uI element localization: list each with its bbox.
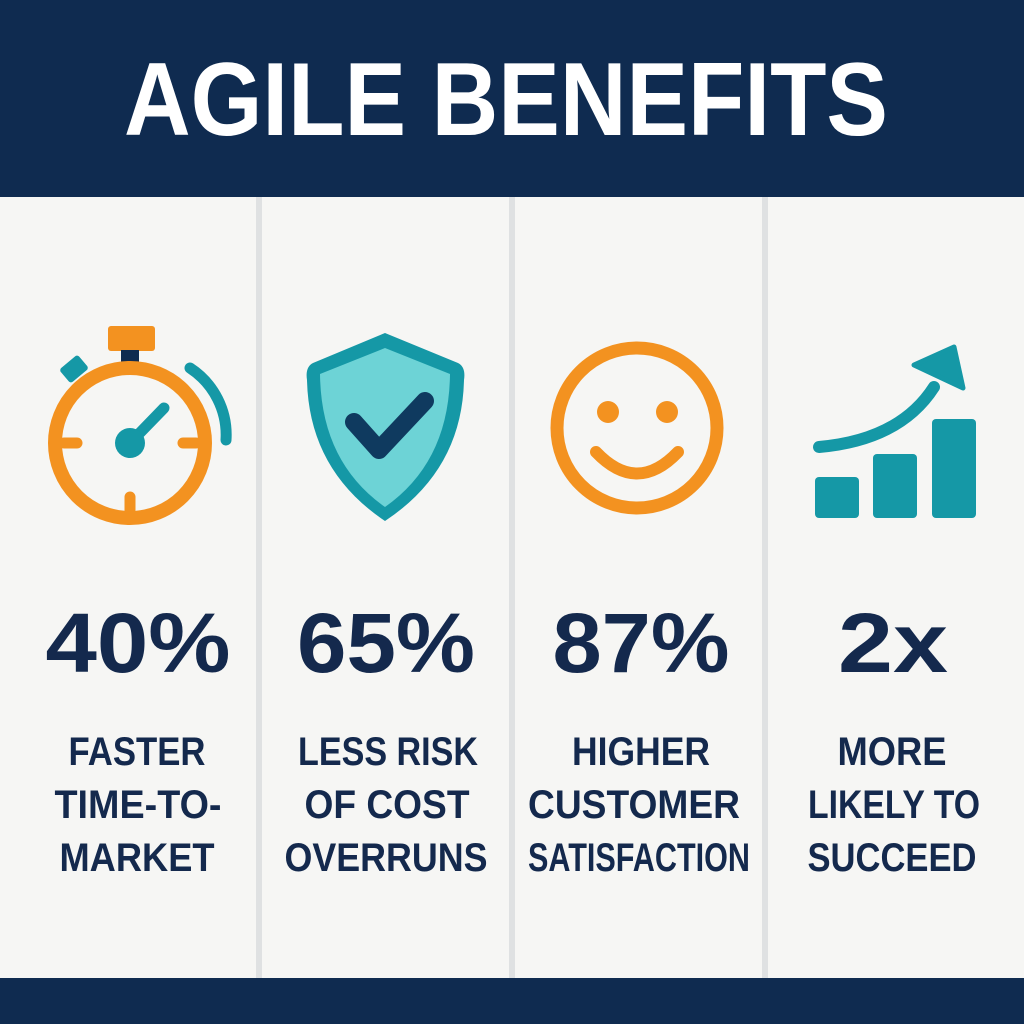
panel: faster time-to-market: [46, 326, 230, 880]
label: faster time-to-market: FASTER: [68, 730, 206, 774]
label: faster time-to-market: TIME-TO-: [54, 783, 222, 827]
label: faster time-to-market: [54, 730, 222, 880]
stat: 40%: 40%: [46, 596, 230, 690]
icon: growth chart: [815, 347, 976, 518]
header banner: [0, 0, 1024, 197]
label: more likely to succeed: LIKELY TO: [808, 783, 980, 827]
footer bar: [0, 978, 1024, 1024]
label: higher customer satisfaction: [528, 730, 750, 880]
stat: 65%: 65%: [297, 596, 475, 690]
label: less risk of cost overruns: LESS RISK: [298, 730, 478, 774]
title: AGILE BENEFITS: [124, 42, 888, 158]
label: faster time-to-market: MARKET: [60, 836, 214, 880]
label: higher customer satisfaction: CUSTOMER: [528, 783, 740, 827]
stat: 87%: 87%: [552, 596, 730, 690]
label: less risk of cost overruns: OVERRUNS: [284, 836, 488, 880]
label: higher customer satisfaction: HIGHER: [572, 730, 710, 774]
label: less risk of cost overruns: OF COST: [304, 783, 470, 827]
icon: smiley face: [557, 348, 717, 508]
icon: shield with check: [307, 333, 464, 521]
panel: higher customer satisfaction: [528, 348, 750, 880]
icon: stopwatch: [55, 326, 226, 518]
label: more likely to succeed: MORE: [838, 730, 946, 774]
label: more likely to succeed: [808, 730, 980, 880]
label: more likely to succeed: SUCCEED: [808, 836, 976, 880]
panel: less risk of cost overruns: [284, 333, 488, 880]
label: higher customer satisfaction: SATISFACTION: [528, 836, 750, 880]
label: less risk of cost overruns: [284, 730, 488, 880]
panel: more likely to succeed: [808, 347, 980, 880]
stat: 2x: 2x: [838, 596, 948, 690]
